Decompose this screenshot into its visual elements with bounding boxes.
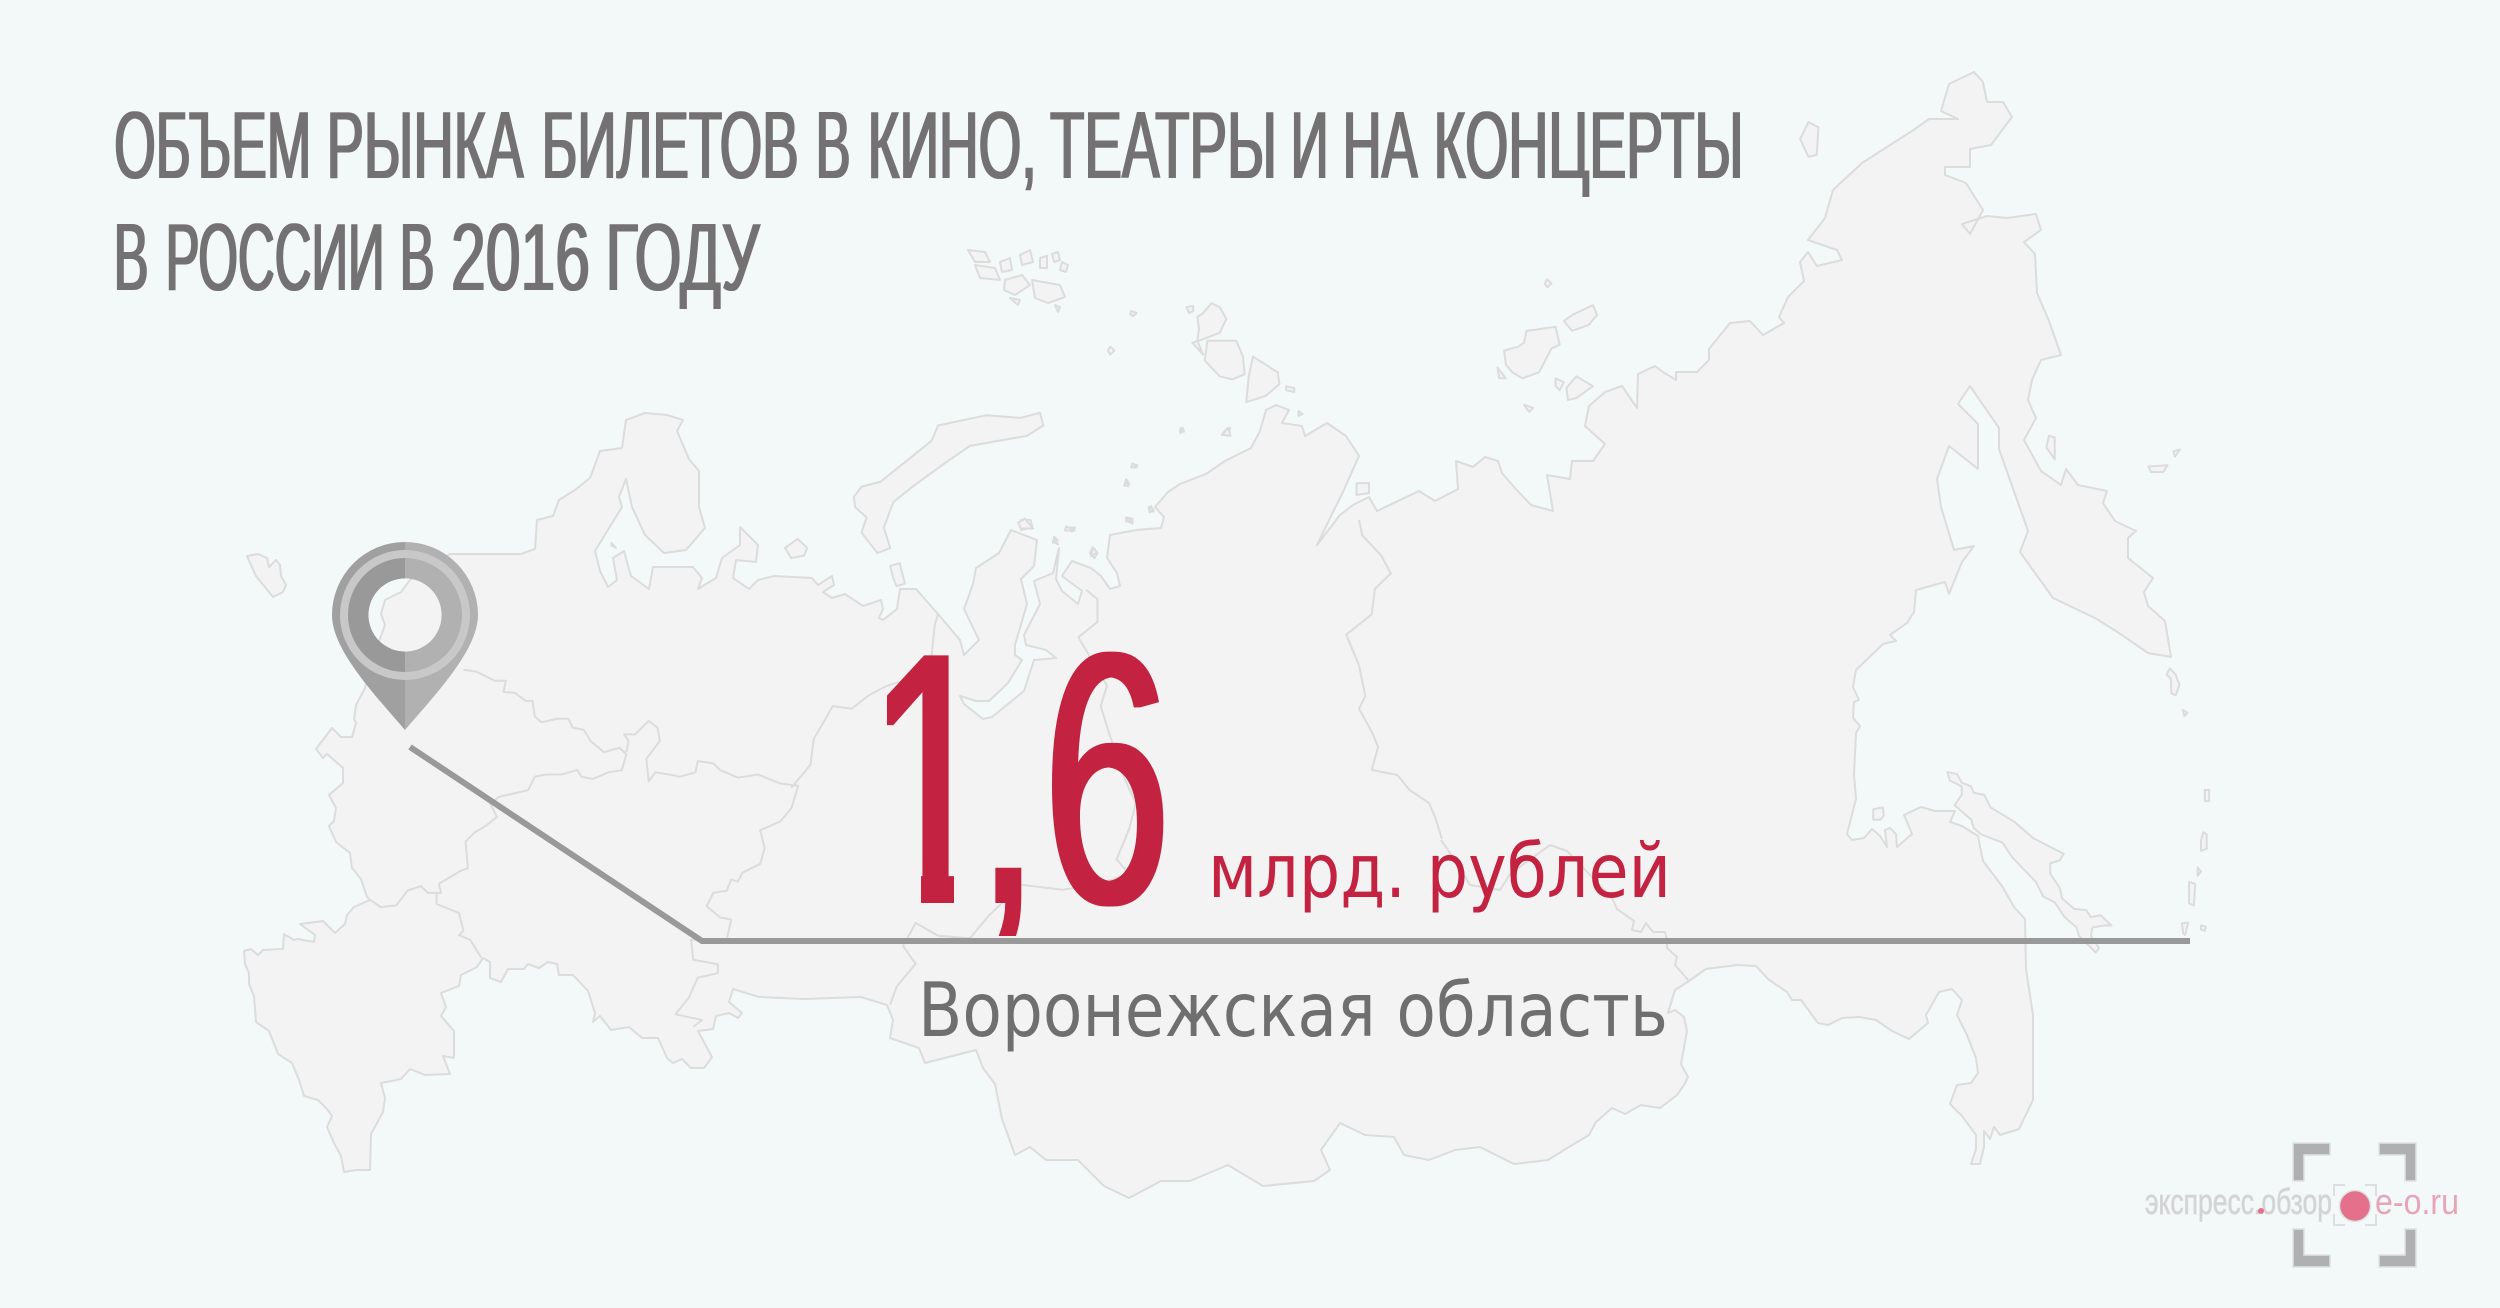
comma: , — [976, 604, 1040, 973]
logo: domain: e-o.ru — [2375, 1181, 2459, 1222]
title line 1: КИНО, — [868, 92, 1037, 199]
title line 2: РОССИИ — [166, 204, 385, 311]
islands: western Arctic — [611, 413, 1230, 586]
title line 1: И — [1291, 92, 1329, 199]
logo: small brackets — [2334, 1185, 2376, 1225]
island: Shantar — [1873, 807, 1884, 820]
value: 1,6 — [886, 652, 1164, 936]
logo: corner brackets — [2293, 1143, 2416, 1267]
island: Vaygach — [890, 563, 905, 586]
islands: Severnaya Zemlya, New Siberian, Wrangel — [1018, 122, 2180, 556]
logo: record circle — [2340, 1190, 2370, 1222]
logo: small dot — [2258, 1208, 2264, 1214]
logo — [2145, 1143, 2459, 1267]
title line 1: ОБЪЕМ — [114, 92, 311, 199]
islands: Franz Josef Land — [968, 250, 1068, 312]
island: Kaliningrad exclave — [247, 554, 286, 597]
title line 1: РЫНКА — [327, 92, 524, 199]
title line 1 — [114, 92, 1744, 199]
title line 1: КОНЦЕРТЫ — [1434, 92, 1744, 199]
unit: billion rubles: млрд. рублей — [1208, 827, 1671, 915]
map of Russia — [244, 72, 2209, 1198]
title line 2: В — [114, 204, 149, 311]
title — [114, 92, 1744, 311]
island: Novaya Zemlya — [854, 413, 1043, 553]
title line 2: 2016 — [451, 204, 590, 311]
icon: location pin — [332, 542, 478, 730]
leader line from pin to label — [410, 747, 2190, 941]
logo: site name: экспресс.обзор — [2145, 1181, 2332, 1222]
digit 1: 1 — [868, 578, 995, 980]
title line 1: ТЕАТРЫ — [1050, 92, 1277, 199]
title line 1: В — [816, 92, 851, 199]
small Kara Sea islands — [611, 428, 1230, 558]
title line 1: НА — [1343, 92, 1418, 199]
title line 2: ГОДУ — [606, 204, 760, 311]
mainland outline — [244, 72, 2171, 1198]
region name: Воронежская область — [918, 966, 1668, 1054]
islands: Kurils — [2167, 668, 2209, 935]
digit 6: 6 — [1043, 578, 1170, 980]
island: Kolguev — [785, 539, 807, 558]
islands: Sakhalin, Shantar, Kurils — [1873, 668, 2209, 952]
title line 2: В — [400, 204, 435, 311]
federal district boundaries — [370, 520, 1689, 1027]
title line 2 — [114, 204, 760, 311]
title line 1: БИЛЕТОВ — [542, 92, 799, 199]
island: Sakhalin — [1947, 772, 2112, 952]
